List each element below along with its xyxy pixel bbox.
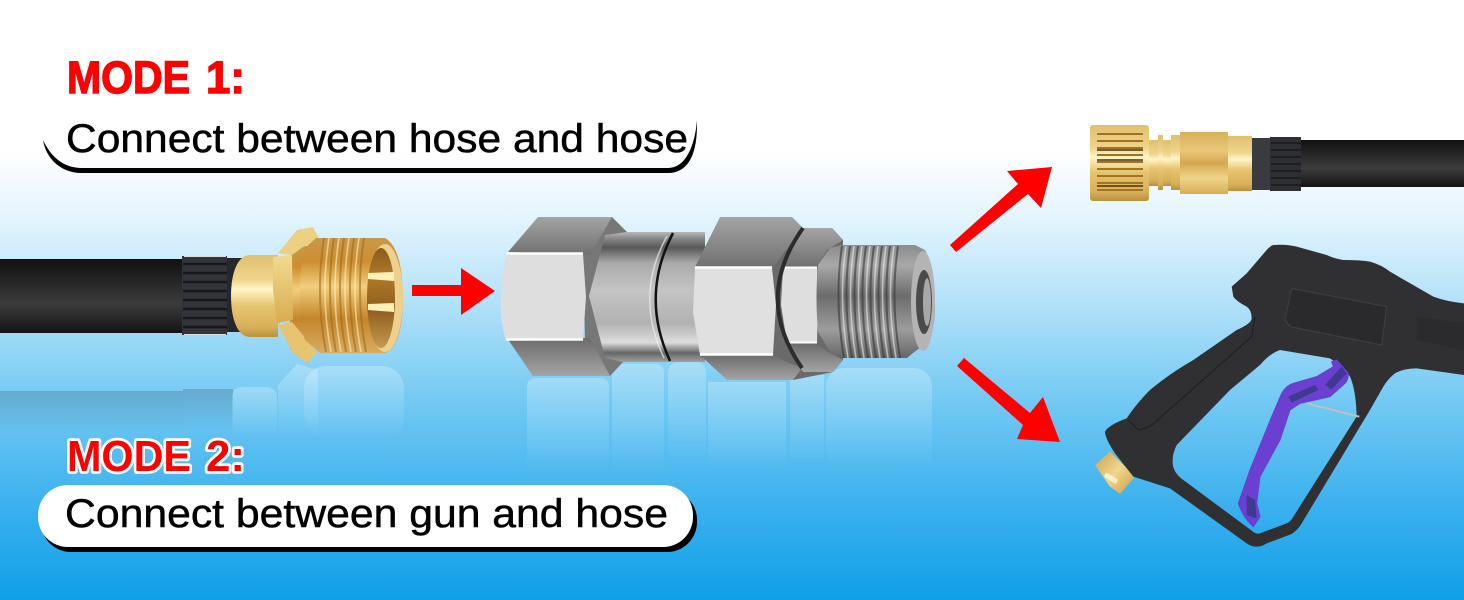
hose with brass quick connector: [1090, 125, 1464, 201]
brass nut: [1095, 452, 1135, 494]
grip edge: [1128, 317, 1255, 430]
heading: mode 2: MODE: [67, 432, 191, 481]
rear handle recess: [1417, 317, 1464, 350]
left hose with brass fitting: [0, 227, 403, 363]
ferrule: [182, 256, 242, 335]
hose: [1300, 140, 1464, 187]
spray gun: [1095, 245, 1464, 547]
swivel connector: [501, 217, 935, 380]
pill: connect between gun and hose: [38, 485, 697, 552]
heading: mode 1: 1:: [206, 52, 245, 103]
barrel: [586, 232, 705, 362]
arrow: swivel up to hose connector: [950, 167, 1052, 252]
heading: mode 2: 2:: [206, 432, 245, 481]
ferrule: [1252, 137, 1301, 191]
arrow: hose fitting to swivel: [412, 268, 495, 315]
hex nut 2: [693, 217, 803, 380]
hex nut 3: [781, 228, 843, 372]
collar: [231, 255, 278, 337]
trigger pin: [1307, 403, 1359, 417]
hex nut: [273, 227, 320, 363]
threaded end: [816, 245, 935, 358]
gun body: [1105, 245, 1464, 547]
trigger: [1238, 360, 1348, 527]
hose: [0, 259, 184, 333]
neck behind hex: [290, 246, 312, 350]
threads: [300, 238, 403, 353]
hex base behind nuts 2 and 3: [772, 228, 843, 380]
arrow: swivel down to gun: [957, 358, 1060, 442]
reflection: swivel connector: [527, 362, 932, 474]
gap between nuts: [778, 228, 803, 368]
reflection: left hose and brass fitting: [0, 364, 404, 438]
fitting mouth: [367, 244, 403, 352]
knurled nut: [1090, 125, 1149, 201]
heading: mode 1: MODE: [67, 52, 190, 103]
pill: connect between gun and hose: Connect between gun and hose: [65, 492, 668, 536]
brass body: [1148, 132, 1252, 194]
hex nut 1: [501, 217, 627, 376]
pill: connect between hose and hose: Connect between hose and hose: [66, 117, 688, 161]
grip panel: [1285, 288, 1387, 345]
